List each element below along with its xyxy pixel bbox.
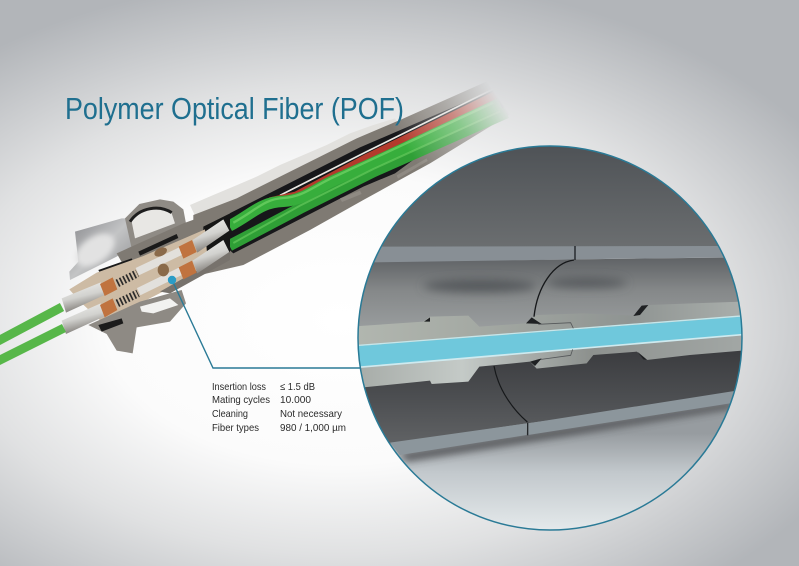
fiber types value: 980 / 1,000 µm bbox=[280, 423, 346, 434]
bronze retainer upper bbox=[153, 246, 168, 258]
slit bottom bbox=[527, 423, 528, 435]
shadow under sleeve bbox=[400, 402, 733, 462]
fibre upper edge bbox=[350, 315, 750, 346]
inner contact step bottom bbox=[537, 349, 573, 360]
shell slot upper bbox=[138, 234, 178, 256]
insertion loss label: Insertion loss bbox=[212, 382, 266, 393]
lower interior bbox=[365, 350, 741, 444]
contact joints bbox=[424, 305, 648, 366]
nut cavity bbox=[132, 209, 175, 238]
lower green highlight bbox=[233, 111, 500, 243]
ferrule lower left bbox=[62, 303, 105, 334]
upper sleeve band bbox=[367, 246, 730, 263]
interior shadow smudge right bbox=[547, 278, 627, 288]
cable assembly bbox=[190, 80, 512, 277]
fibre lower edge bbox=[350, 334, 750, 368]
bronze retainer lower bbox=[158, 264, 169, 276]
insertion loss value: ≤ 1.5 dB bbox=[280, 382, 315, 393]
magnified detail circle bbox=[350, 140, 750, 540]
outer translucent sheath bbox=[190, 118, 396, 214]
floor below sleeve bbox=[390, 404, 730, 529]
slit top bbox=[574, 246, 576, 260]
cable interior bbox=[230, 94, 487, 254]
black seam bottom bbox=[494, 366, 527, 422]
cleaning label: Cleaning bbox=[212, 409, 248, 420]
flange lower bbox=[88, 290, 186, 353]
shell lower body bbox=[160, 252, 230, 293]
black seam top bbox=[534, 260, 574, 317]
ferrule upper right bbox=[193, 219, 229, 253]
hex nut bbox=[69, 218, 132, 280]
upper fibre bbox=[0, 307, 62, 341]
optical fibre bbox=[350, 316, 750, 367]
nut inner shine bbox=[70, 227, 120, 273]
red cable bbox=[270, 95, 497, 202]
inner contact step top bbox=[538, 323, 573, 328]
connector head bbox=[62, 199, 230, 353]
shell slot left bbox=[98, 258, 134, 276]
flange dark slot bbox=[98, 318, 123, 332]
interior shadow smudge bbox=[423, 279, 537, 292]
mating cycles label: Mating cycles bbox=[212, 395, 270, 406]
leader line bbox=[172, 280, 360, 368]
specifications bbox=[212, 382, 346, 434]
circle outline bbox=[358, 146, 742, 530]
ferrule upper left bbox=[62, 282, 105, 313]
upper green cable bbox=[229, 103, 500, 226]
cleaning value: Not necessary bbox=[280, 409, 343, 420]
main shell upper bbox=[117, 207, 230, 265]
retaining nut bbox=[125, 199, 186, 248]
pin lower bbox=[139, 271, 182, 292]
lower fibre bbox=[0, 328, 64, 361]
ferrule lower right bbox=[193, 240, 229, 273]
lower green cable bbox=[229, 113, 507, 246]
white conductor line bbox=[280, 87, 497, 195]
pin upper bbox=[137, 251, 182, 272]
main insert beige bbox=[69, 229, 208, 323]
copper sleeves bbox=[100, 240, 197, 317]
upper interior bbox=[359, 258, 738, 327]
upper metal contact bbox=[350, 301, 750, 347]
spring upper bbox=[117, 273, 137, 283]
spring lower bbox=[117, 293, 138, 303]
shell clip details bbox=[340, 158, 428, 202]
title: Polymer Optical Fiber (POF) bbox=[65, 91, 404, 126]
left green fibre cables bbox=[0, 307, 64, 361]
upper green highlight bbox=[233, 103, 493, 223]
flange cut-out bbox=[140, 298, 178, 313]
metal shell bbox=[193, 80, 512, 277]
mating cycles value: 10.000 bbox=[280, 395, 311, 406]
lower metal contact bbox=[361, 336, 742, 388]
nut cavity dark edge bbox=[130, 208, 172, 222]
black cavity behind tubes bbox=[203, 213, 230, 273]
lower sleeve band bbox=[390, 391, 737, 455]
fiber types label: Fiber types bbox=[212, 423, 259, 434]
leader dot bbox=[168, 276, 176, 284]
upper background bbox=[382, 146, 718, 247]
